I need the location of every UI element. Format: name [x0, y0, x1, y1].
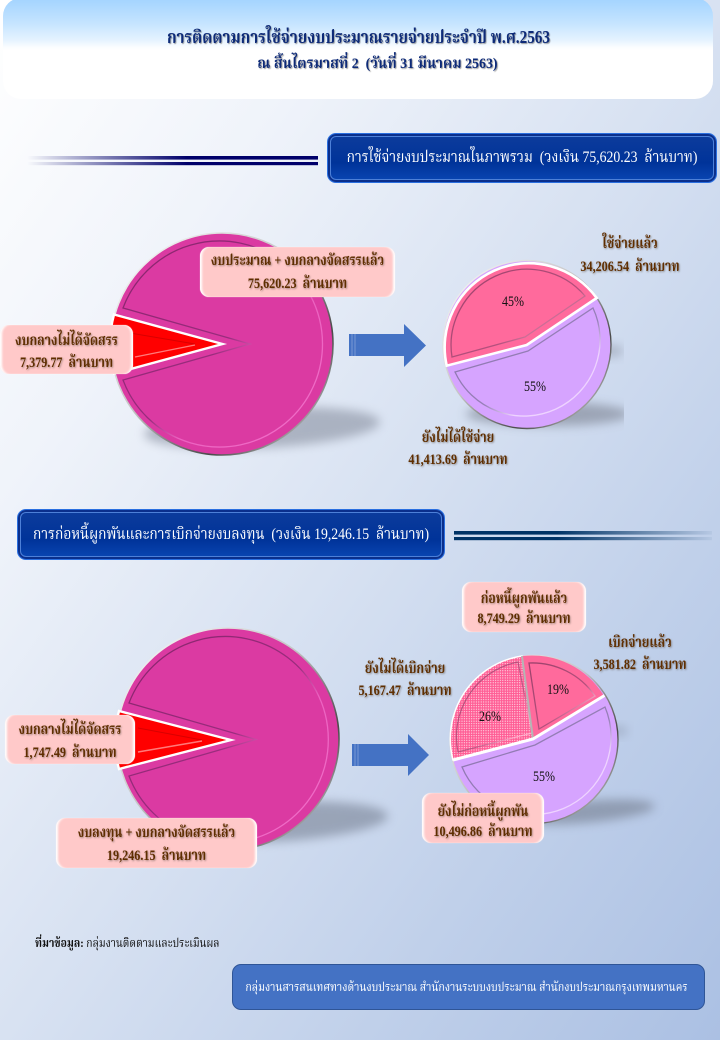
label: uncommitted: ยังไม่ก่อหนี้ผูกพัน: [438, 804, 528, 820]
label: allocated budget total: งบประมาณ + งบกลางจัดสรรแล้ว: [211, 253, 384, 269]
slice: unspent 55%: [455, 308, 600, 416]
charts and arrows: [32, 156, 712, 848]
label: allocated budget total: 75,620.23 ล้านบาท: [248, 276, 347, 292]
slice: spent 45%: [445, 263, 597, 366]
label: capital budget total: 19,246.15 ล้านบาท: [107, 848, 206, 864]
arrow: second section: [352, 734, 429, 776]
label: unallocated central budget 1: งบกลางไม่ได้จัดสรร: [15, 333, 118, 349]
footer credit text: กลุ่มงานสารสนเทศทางด้านงบประมาณ สำนักงานระบบงบประมาณ สำนักงบประมาณกรุงเทพมหานคร: [245, 980, 688, 994]
label: unallocated central budget 2: 1,747.49 ล้านบาท: [23, 745, 117, 761]
label: not yet disbursed: 5,167.47 ล้านบาท: [358, 683, 452, 699]
label: unallocated central budget 1: [0, 325, 133, 374]
slice: unspent 55%: 55%: [524, 379, 546, 395]
data source note: ที่มาข้อมูล: กลุ่มงานติดตามและประเมินผล: [35, 936, 220, 950]
section heading: overall budget spending: [327, 133, 717, 183]
label: not yet disbursed: [358, 658, 452, 699]
label: unallocated central budget 2: งบกลางไม่ได้จัดสรร: [19, 722, 121, 738]
label: uncommitted: [422, 793, 544, 843]
label: capital budget total: [56, 818, 257, 868]
label: allocated budget total: [200, 247, 395, 297]
label: spent: 34,206.54 ล้านบาท: [580, 259, 680, 275]
label: uncommitted: 10,496.86 ล้านบาท: [433, 824, 533, 840]
label: disbursed: เบิกจ่ายแล้ว: [608, 635, 672, 651]
decorative lines: [27, 156, 318, 160]
footer credit box: [232, 964, 705, 1010]
arrow: first section: [349, 324, 426, 367]
label: unallocated central budget 2: [5, 715, 135, 764]
label: disbursed: [593, 634, 688, 673]
slice: disbursed 19%: [522, 655, 604, 739]
label: unallocated central budget 1: 7,379.77 ล้านบาท: [20, 355, 113, 371]
label: capital budget total: งบลงทุน + งบกลางจัดสรรแล้ว: [78, 825, 235, 841]
label: unspent: [408, 426, 508, 468]
section heading: overall budget spending: การใช้จ่ายงบประมาณในภาพรวม (วงเงิน 75,620.23 ล้านบาท): [347, 149, 697, 166]
label: spent: [580, 232, 680, 275]
pie chart: spent vs unspent: [443, 260, 630, 428]
label: committed: ก่อหนี้ผูกพันแล้ว: [481, 591, 567, 607]
section heading: commitment and capital disbursement: การก่อหนี้ผูกพันและการเบิกจ่ายงบลงทุน (วงเงิน 19,246.15 ล้านบาท): [33, 526, 429, 543]
header banner: [3, 0, 713, 99]
label: not yet disbursed: ยังไม่ได้เบิกจ่าย: [365, 661, 445, 677]
slice: uncommitted 55%: 55%: [533, 769, 555, 785]
label: disbursed: 3,581.82 ล้านบาท: [593, 657, 687, 673]
slice: not yet disbursed 26%: [450, 656, 533, 760]
slice: spent 45%: 45%: [502, 294, 524, 310]
label: unspent: ยังไม่ได้ใช้จ่าย: [422, 430, 494, 446]
label: unspent: 41,413.69 ล้านบาท: [408, 452, 508, 468]
pie chart: total budget with unallocated central budget: [110, 233, 381, 455]
label: committed: [462, 582, 586, 632]
subtitle: ณ สิ้นไตรมาสที่ 2 (วันที่ 31 มีนาคม 2563): [257, 56, 498, 72]
label: committed: 8,749.29 ล้านบาท: [477, 611, 571, 627]
slice: uncommitted 55%: [453, 696, 611, 815]
slice: disbursed 19%: 19%: [547, 682, 569, 698]
label: spent: ใช้จ่ายแล้ว: [602, 236, 658, 252]
slice: not yet disbursed 26%: 26%: [479, 709, 501, 725]
pie chart: committed, disbursed, uncommitted: [450, 655, 656, 829]
title: การติดตามการใช้จ่ายงบประมาณรายจ่ายประจำปี พ.ศ.2563: [167, 27, 550, 47]
pie chart: capital budget with unallocated central budget: [115, 628, 389, 850]
section heading: commitment and capital disbursement: [17, 509, 445, 560]
